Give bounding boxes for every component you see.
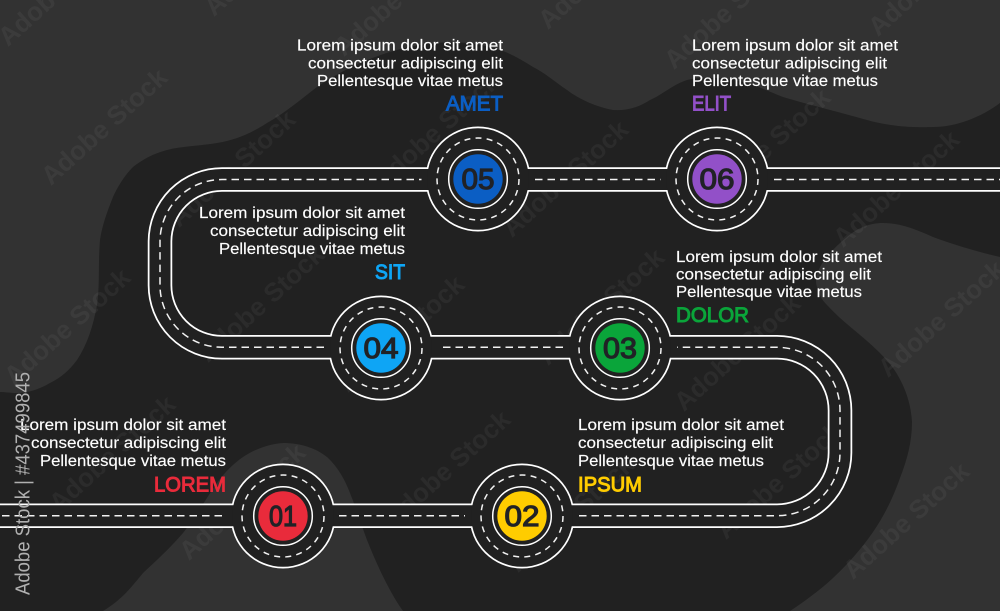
stop 01	[242, 475, 324, 557]
text block: dolor	[676, 249, 883, 327]
stop 01: 01	[269, 501, 297, 533]
watermarks: Adobe Stock	[710, 416, 848, 545]
stop 02: 02	[504, 501, 540, 533]
background blob: right	[790, 223, 1000, 611]
stop 02	[481, 475, 563, 557]
watermarks: Adobe Stock	[827, 124, 965, 253]
text block: lorem: LOREM	[154, 474, 226, 496]
side credit: Adobe Stock | #437499845	[12, 372, 34, 595]
road edges	[0, 180, 1000, 516]
text block: dolor: Pellentesque vitae metus	[676, 284, 862, 301]
text block: ipsum: consectetur adipiscing elit	[578, 435, 774, 452]
text block: dolor: consectetur adipiscing elit	[676, 266, 872, 284]
text block: elit: ELIT	[692, 93, 731, 116]
stop 06: 06	[700, 164, 734, 196]
watermarks: Adobe Stock	[192, 239, 330, 368]
text block: sit	[199, 205, 406, 284]
watermarks: Adobe Stock	[698, 82, 836, 211]
text block: dolor: Lorem ipsum dolor sit amet	[676, 249, 883, 266]
watermarks: Adobe Stock	[496, 114, 634, 243]
ring interiors	[232, 128, 768, 567]
text block: ipsum: Lorem ipsum dolor sit amet	[578, 417, 785, 434]
road surface	[0, 180, 1000, 516]
stop 04	[340, 307, 422, 389]
watermarks: Adobe Stock	[668, 288, 806, 417]
background blob: bottom	[103, 443, 403, 611]
text block: elit: Pellentesque vitae metus	[692, 73, 878, 90]
text block: ipsum: IPSUM	[578, 474, 642, 496]
stop 06	[676, 138, 758, 220]
text block: amet: AMET	[446, 93, 503, 116]
watermarks: Adobe Stock	[367, 66, 505, 195]
text block: ipsum	[578, 417, 785, 496]
watermarks: Adobe Stock	[0, 262, 136, 391]
text block: elit: consectetur adipiscing elit	[692, 56, 888, 72]
watermarks: Adobe Stock	[35, 62, 173, 191]
watermarks: Adobe Stock	[378, 404, 516, 533]
road centre dashes	[2, 180, 1000, 516]
watermarks: Adobe Stock	[173, 437, 311, 566]
watermarks: Adobe Stock	[502, 449, 640, 578]
text block: lorem: consectetur adipiscing elit	[31, 435, 227, 452]
text block: sit: SIT	[375, 261, 405, 284]
text block: amet: Lorem ipsum dolor sit amet	[297, 38, 504, 55]
watermarks: Adobe Stock	[332, 269, 470, 398]
stop 03	[579, 307, 661, 389]
watermarks: Adobe Stock	[837, 456, 975, 585]
road: winding path	[0, 126, 1000, 568]
stop 05: 05	[462, 164, 494, 196]
stop 03: 03	[603, 333, 637, 365]
background blob: top and left	[0, 0, 1000, 393]
text block: dolor: DOLOR	[676, 304, 749, 327]
stop 04: 04	[364, 333, 398, 365]
text block: lorem: Pellentesque vitae metus	[40, 453, 226, 470]
text block: lorem: Lorem ipsum dolor sit amet	[20, 417, 227, 434]
text block: amet: consectetur adipiscing elit	[308, 56, 504, 72]
text block: elit	[692, 38, 899, 116]
text block: sit: Lorem ipsum dolor sit amet	[199, 205, 406, 222]
text block: ipsum: Pellentesque vitae metus	[578, 453, 764, 470]
text block: sit: Pellentesque vitae metus	[219, 241, 405, 258]
text block: lorem	[20, 417, 227, 496]
text block: elit: Lorem ipsum dolor sit amet	[692, 38, 899, 55]
outer rings of stops	[230, 126, 770, 568]
watermarks: Adobe Stock	[532, 242, 670, 371]
watermarks: Adobe Stock	[163, 104, 301, 233]
text block: amet	[297, 38, 504, 116]
watermarks: Adobe Stock	[43, 389, 181, 518]
text block: sit: consectetur adipiscing elit	[210, 223, 406, 240]
stop 05	[437, 138, 519, 220]
text block: amet: Pellentesque vitae metus	[317, 73, 503, 90]
